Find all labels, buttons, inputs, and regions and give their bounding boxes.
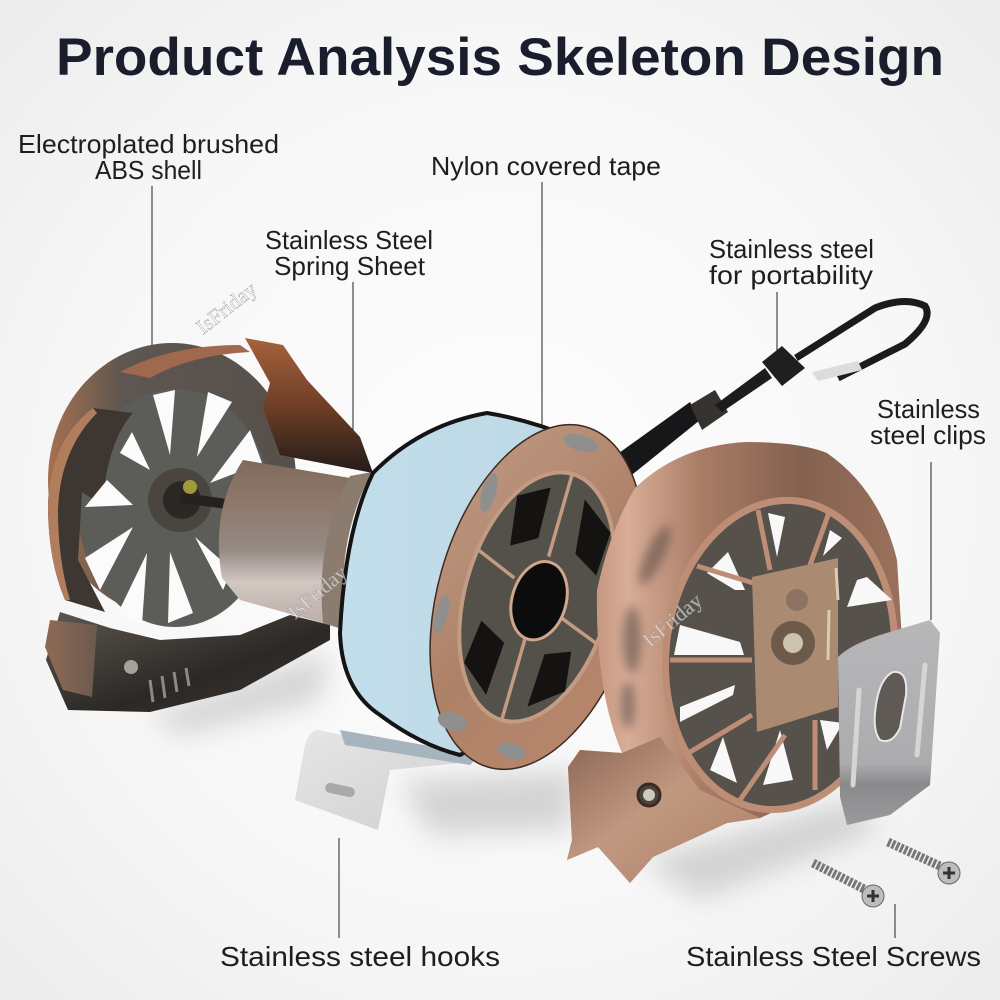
brushed streaks bbox=[621, 522, 677, 729]
front plate bbox=[393, 400, 681, 794]
label: Nylon covered tape: Nylon covered tape bbox=[431, 151, 661, 181]
stainless steel clip bbox=[838, 620, 940, 825]
label: Stainless steel hooks: Stainless steel hooks bbox=[220, 941, 500, 972]
white gaps between spokes bbox=[85, 390, 262, 625]
label: Electroplated brushed ABS shell bbox=[18, 129, 279, 352]
inner dark window bbox=[433, 454, 641, 740]
label: Stainless steel for portability: for portability bbox=[709, 260, 873, 290]
label: Stainless Steel Spring Sheet: Stainless Steel bbox=[265, 225, 433, 255]
label: Stainless Steel Spring Sheet bbox=[265, 225, 433, 432]
spring cylinder bbox=[219, 460, 372, 630]
carabiner and strap bbox=[612, 301, 927, 478]
stainless steel hook bbox=[295, 730, 480, 830]
hub bbox=[148, 468, 212, 532]
rim slots bbox=[403, 410, 662, 776]
right shell bbox=[567, 442, 910, 883]
label: Stainless steel for portability bbox=[709, 234, 874, 358]
label: Stainless steel clips bbox=[870, 394, 986, 620]
outer rim bbox=[48, 343, 296, 617]
screw hole on foot bbox=[638, 784, 660, 806]
title: Product Analysis Skeleton Design bbox=[56, 28, 944, 87]
black cavities bbox=[457, 478, 618, 715]
label: Stainless steel for portability: Stainless steel bbox=[709, 234, 874, 264]
label: Stainless Steel Screws: Stainless Steel Screws bbox=[686, 941, 981, 972]
label: Stainless steel clips: Stainless bbox=[877, 394, 980, 424]
screw 2 bbox=[888, 842, 960, 884]
copper cross bbox=[435, 456, 638, 739]
label: Electroplated brushed ABS shell: ABS shell bbox=[95, 155, 202, 185]
label: Electroplated brushed ABS shell: Electroplated brushed bbox=[18, 129, 279, 159]
screw 1 bbox=[813, 863, 884, 907]
foot bbox=[567, 737, 760, 883]
label: Stainless Steel Spring Sheet: Spring Sheet bbox=[274, 251, 426, 281]
label: Stainless steel clips: steel clips bbox=[870, 420, 986, 450]
centre hole bbox=[502, 555, 576, 647]
watermarks bbox=[191, 277, 707, 652]
fan window bbox=[650, 489, 910, 821]
shadows bbox=[150, 650, 880, 900]
spoke disc bbox=[78, 389, 272, 627]
watermarks: IsFriday bbox=[191, 277, 262, 339]
left shell with spokes bbox=[48, 343, 296, 627]
stainless steel spring sheet bbox=[245, 338, 373, 473]
left crescent bbox=[48, 408, 133, 612]
shell body bbox=[567, 442, 902, 883]
watermarks: IsFriday bbox=[638, 588, 707, 652]
watermarks: IsFriday bbox=[283, 560, 352, 624]
tape drum bbox=[340, 400, 681, 794]
left shell base bbox=[45, 612, 330, 712]
fan spokes bbox=[670, 510, 830, 800]
nylon tape side bbox=[340, 413, 640, 755]
inner clip plate bbox=[752, 558, 838, 732]
white gaps in fan bbox=[674, 513, 892, 785]
